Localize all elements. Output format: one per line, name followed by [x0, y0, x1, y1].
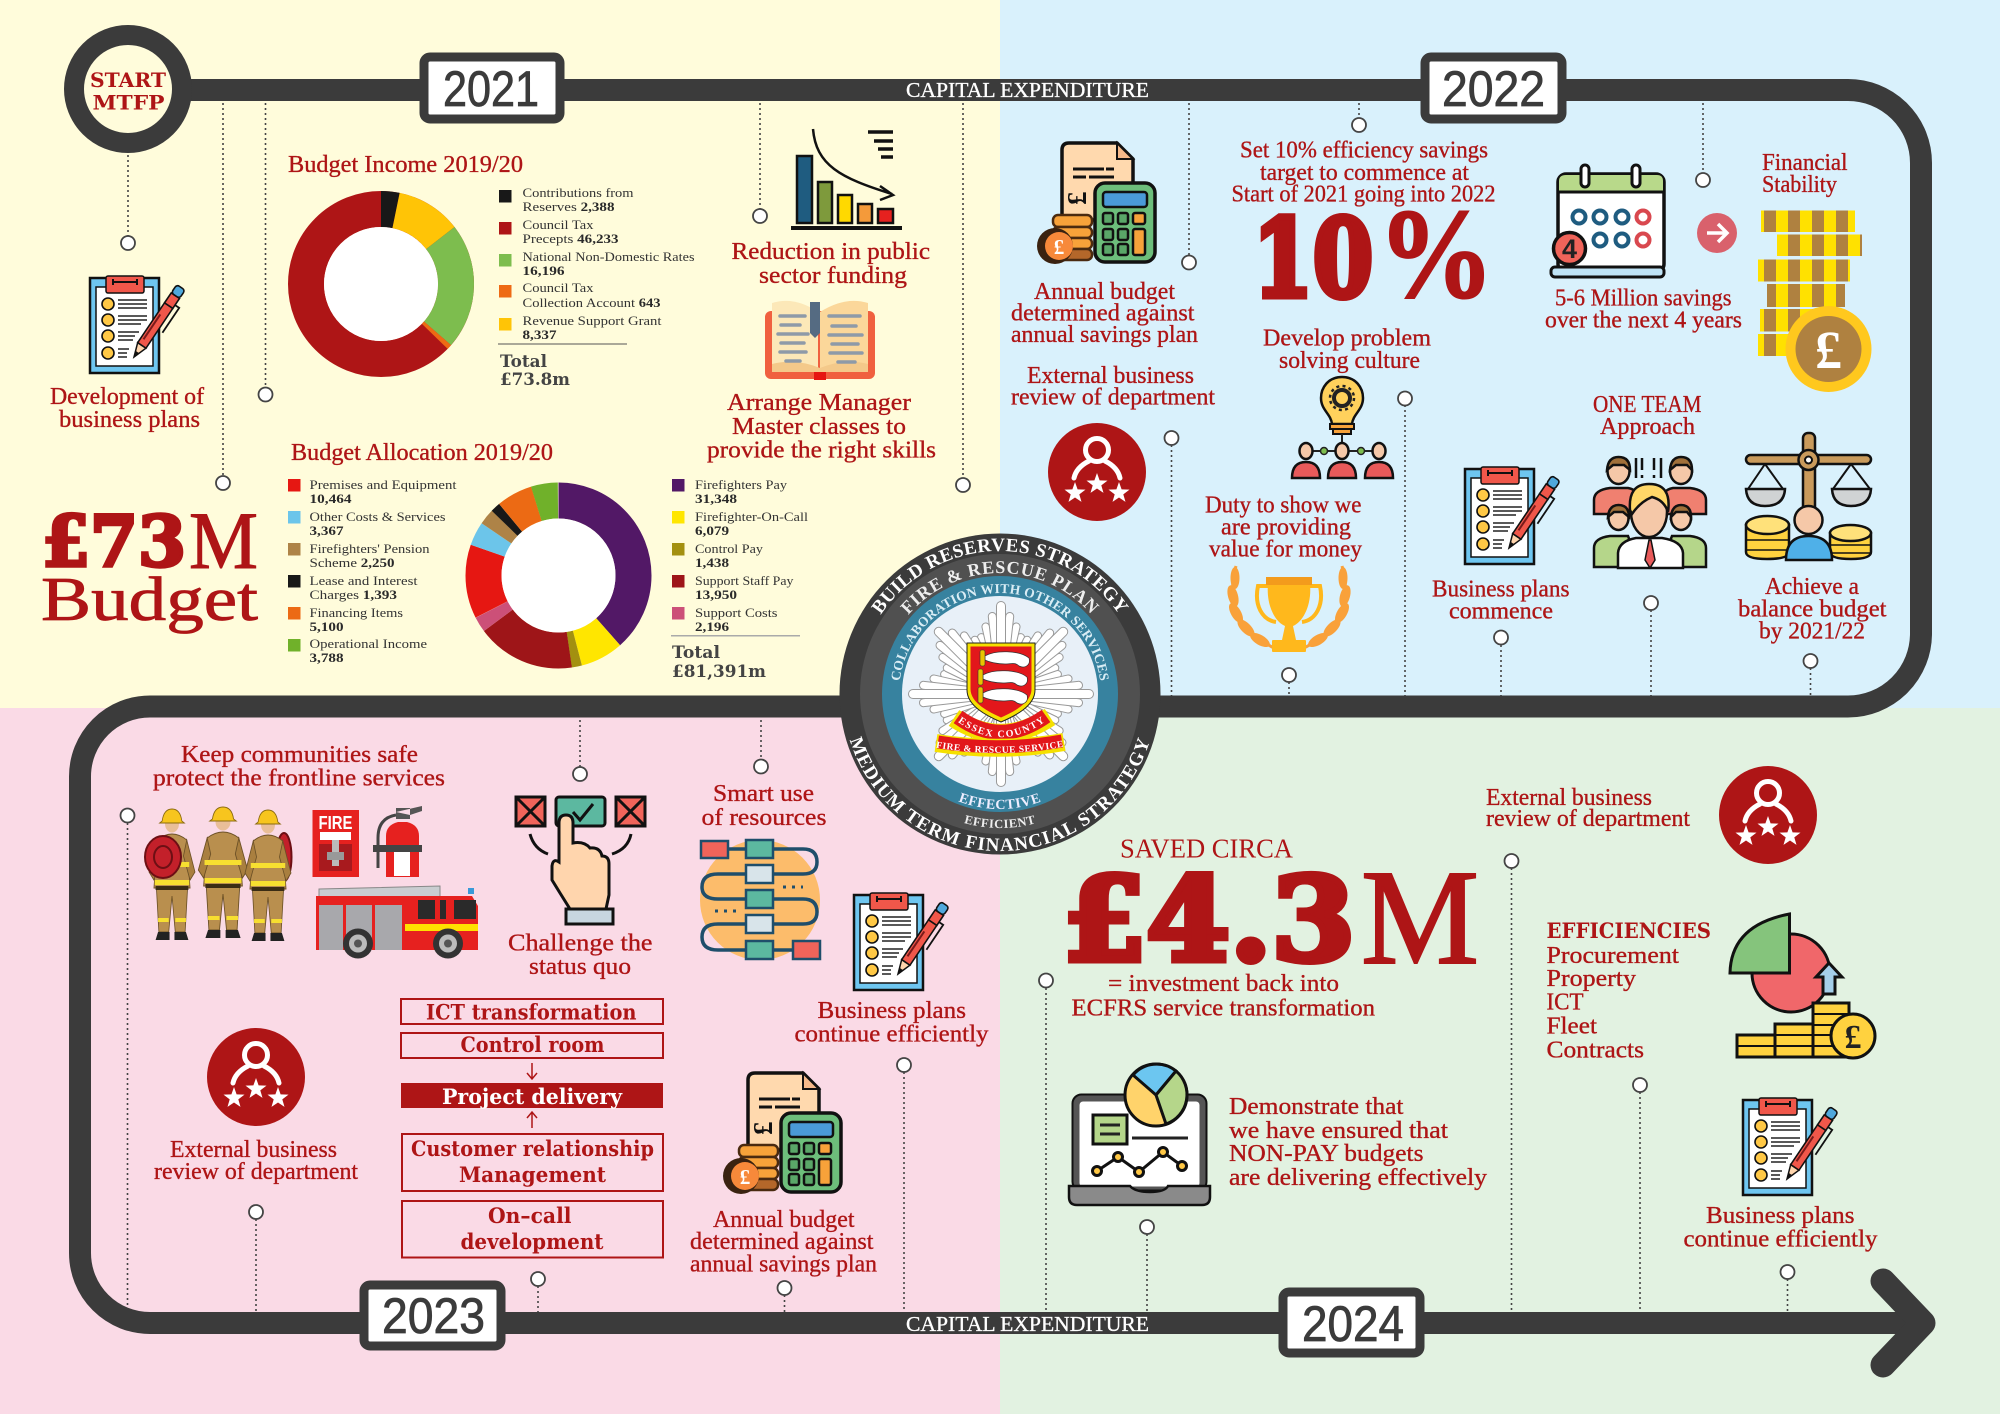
year box 2021: 2021 [443, 61, 539, 117]
legend: allocation left: 5,100 [310, 619, 344, 634]
text: reduction in public sector funding: Reduction in public [732, 239, 930, 265]
icon: coin stacks [1758, 210, 1872, 392]
text: efficiencies list: EFFICIENCIES [1546, 918, 1711, 943]
legend: budget income: Council Tax [522, 217, 594, 232]
text: one team: Approach [1600, 414, 1695, 440]
text: demonstrate non-pay: NON-PAY budgets [1229, 1141, 1424, 1167]
text: keep communities safe: protect the frontline services [153, 766, 445, 792]
icon: clipboard [1465, 467, 1564, 564]
icon: clipboard [854, 893, 953, 990]
project list: project delivery: Project delivery [442, 1084, 623, 1109]
text: efficiency target [1232, 138, 1496, 208]
icon: open book [765, 301, 875, 380]
icon: pie chart with coins: £ [1844, 1019, 1862, 1056]
start marker: START [90, 68, 166, 92]
headline: 4.3M: M [1361, 843, 1479, 993]
legend: budget income: Revenue Support Grant [522, 313, 662, 328]
text: challenge the status quo: Challenge the [508, 930, 652, 956]
text: value for money: are providing [1221, 514, 1351, 540]
text: financial stability [1762, 150, 1848, 198]
legend: budget income: Council Tax [522, 280, 594, 295]
legend: allocation left: 3,367 [310, 523, 344, 538]
text: annual budget: Annual budget [1034, 279, 1175, 305]
legend: budget income: Contributions from [522, 185, 634, 200]
text: annual budget: determined against [1011, 300, 1195, 326]
text: value for money: Duty to show we [1205, 492, 1362, 518]
project list: control room [401, 1032, 663, 1058]
icon: calendar with savings: 4 [1562, 234, 1577, 264]
project list: customer relationship management [402, 1134, 663, 1191]
text: development of business plans: Development of [50, 384, 204, 410]
panel: 2021 [41, 129, 936, 682]
text: challenge the status quo: status quo [529, 954, 631, 980]
legend: budget income: Collection Account 643 [522, 295, 661, 310]
text: value for money: value for money [1209, 536, 1362, 562]
legend: budget income: Reserves 2,388 [522, 199, 615, 214]
headline: 4.3M: £4.3 [1063, 853, 1355, 988]
icon: challenge hand [516, 797, 645, 924]
project list: ict transformation: ICT transformation [426, 1000, 636, 1024]
text: development of business plans [50, 384, 204, 433]
text: business plans commence: commence [1449, 598, 1553, 624]
text: demonstrate non-pay: Demonstrate that [1229, 1094, 1404, 1120]
icon: team [1594, 457, 1706, 568]
background: green quadrant [1000, 708, 2000, 1414]
text: external review: review of department [1011, 384, 1215, 410]
background: pink quadrant [0, 708, 1000, 1414]
text: business plans continue [794, 998, 988, 1048]
panel: 2024 [1063, 766, 1878, 1252]
text: reduction in public sector funding [732, 239, 930, 289]
text: external review: External business [170, 1137, 337, 1163]
legend: allocation right: 31,348 [695, 491, 738, 506]
central badge: EFFICIENT [964, 815, 1034, 828]
legend: allocation left: Firefighters' Pension [310, 541, 430, 556]
central badge [840, 534, 1160, 854]
icon: arrow circle [1697, 213, 1737, 253]
text: efficiencies list [1546, 918, 1711, 1064]
legend: allocation right: £81,391m [672, 662, 766, 682]
legend: allocation left: Charges 1,393 [310, 587, 398, 602]
text: arrange manager master classes [707, 390, 936, 464]
text: keep communities safe: Keep communities safe [181, 742, 418, 768]
text: efficiency target: Set 10% efficiency savings [1240, 138, 1488, 164]
crest: banners [934, 709, 1066, 757]
text: smart use of resources [702, 781, 826, 831]
text: achieve balance budget: balance budget [1738, 596, 1887, 622]
headline: 10 percent: % [1378, 183, 1494, 325]
legend: allocation left: Scheme 2,250 [310, 555, 394, 570]
legend: allocation right [671, 477, 808, 682]
text: external review [1011, 363, 1215, 410]
icon: fire alarm sign [312, 810, 359, 877]
icon: fire alarm sign: FIRE [318, 813, 352, 833]
heading: budget income: Budget Income 2019/20 [288, 152, 523, 178]
text: reduction in public sector funding: sector funding [759, 263, 907, 289]
icon: firefighters [145, 807, 292, 941]
legend: allocation right: Control Pay [695, 541, 764, 556]
legend: allocation right: Firefighter-On-Call [695, 509, 808, 524]
crest: banners: FIRE & RESCUE SERVICE [936, 740, 1064, 753]
text: efficiencies list: Contracts [1546, 1038, 1644, 1064]
project list: project delivery [401, 1083, 663, 1109]
text: efficiencies list: Property [1546, 966, 1636, 992]
project list: customer relationship management: Management [459, 1162, 606, 1187]
icon: pie chart with coins [1730, 914, 1875, 1058]
text: savings over four years: 5-6 Million savings [1555, 286, 1732, 312]
legend: budget income: Precepts 46,233 [522, 231, 619, 246]
text: business plans commence: Business plans [1432, 576, 1570, 602]
text: business plans continue: Business plans [1706, 1203, 1854, 1229]
legend: allocation left: Operational Income [310, 636, 427, 651]
legend: allocation left: Financing Items [310, 605, 403, 620]
icon: award [207, 1028, 305, 1126]
start marker: MTFP [92, 90, 164, 114]
central badge: BUILD RESERVES STRATEGY [870, 538, 1129, 615]
project list: on-call development: On–call [488, 1203, 572, 1228]
arrow up [527, 1112, 537, 1128]
legend: allocation right: Support Costs [695, 605, 778, 620]
icon: coin stacks: £ [1815, 320, 1842, 380]
text: external review [1486, 785, 1690, 832]
text: value for money [1205, 492, 1362, 562]
legend: allocation left: Lease and Interest [310, 573, 418, 588]
legend: allocation left: Other Costs & Services [310, 509, 446, 524]
legend: budget income: 8,337 [522, 327, 557, 342]
text: one team [1593, 392, 1702, 440]
text: smart use of resources: Smart use [713, 781, 814, 807]
text: financial stability: Stability [1762, 172, 1837, 198]
headline: 73M budget: Budget [41, 566, 258, 634]
central badge: MEDIUM TERM FINANCIAL STRATEGY [850, 736, 1149, 852]
text: annual budget: annual savings plan [690, 1252, 877, 1278]
arrow down [527, 1063, 537, 1079]
text: arrange manager master classes: provide the right skills [707, 438, 936, 464]
headline: 10 percent [1253, 183, 1494, 325]
text: financial stability: Financial [1762, 150, 1848, 176]
text: efficiencies list: ICT [1546, 990, 1584, 1016]
legend: allocation left: 3,788 [310, 650, 344, 665]
heading: budget allocation: Budget Allocation 2019/20 [291, 440, 553, 466]
text: investment: ECFRS service transformation [1072, 996, 1375, 1022]
text: achieve balance budget: Achieve a [1765, 574, 1859, 600]
text: development of business plans: business plans [59, 407, 200, 433]
icon: idea bulb and team [1292, 377, 1393, 478]
text: external review: review of department [1486, 806, 1690, 832]
headline: 73M budget: M [189, 495, 258, 586]
legend: allocation left: Premises and Equipment [310, 477, 457, 492]
legend: allocation right: 13,950 [695, 587, 737, 602]
legend: budget income: £73.8m [500, 370, 570, 390]
legend: allocation right: Firefighters Pay [695, 477, 788, 492]
panel: 2022 [1011, 138, 1887, 652]
legend: allocation left: 10,464 [310, 491, 352, 506]
legend: allocation right: Total [672, 643, 721, 663]
headline: 10 percent: 10 [1253, 197, 1373, 322]
text: annual budget: annual savings plan [1011, 322, 1198, 348]
text: problem solving [1263, 326, 1431, 374]
headline: 4.3M [1063, 843, 1479, 993]
text: business plans continue: continue efficiently [1684, 1226, 1878, 1252]
text: annual budget [1011, 279, 1198, 348]
text: business plans continue: continue efficiently [794, 1022, 988, 1048]
panel: 2023 [145, 742, 988, 1278]
headline: 73M budget: £73 [42, 500, 186, 583]
text: external review: review of department [154, 1159, 358, 1185]
icon: calendar with savings [1551, 165, 1664, 277]
icon: fire engine [316, 886, 478, 958]
text: external review: External business [1027, 363, 1194, 389]
text: external review [154, 1137, 358, 1185]
icon: fire extinguisher [373, 806, 422, 877]
text: saved circa: SAVED CIRCA [1120, 834, 1293, 864]
year box 2024: 2024 [1302, 1296, 1404, 1352]
background: blue quadrant [1000, 0, 2000, 708]
text: business plans commence [1432, 576, 1570, 624]
icon: falling bar chart [791, 129, 902, 230]
project list: customer relationship management: Customer relationship [411, 1136, 654, 1161]
text: annual budget: determined against [690, 1229, 874, 1255]
icon: resource flow [700, 840, 820, 960]
central badge: COLLABORATION WITH OTHER SERVICES [892, 584, 1109, 680]
text: arrange manager master classes: Master classes to [732, 414, 906, 440]
text: demonstrate non-pay: we have ensured that [1229, 1118, 1448, 1144]
icon: scales and coins [1746, 433, 1871, 560]
text: achieve balance budget [1738, 574, 1887, 644]
text: investment [1072, 971, 1375, 1022]
legend: budget income: 16,196 [522, 263, 565, 278]
text: problem solving: solving culture [1279, 348, 1420, 374]
icon: award [1048, 423, 1146, 521]
text: business plans continue: Business plans [818, 998, 966, 1024]
project list: on-call development: development [460, 1229, 604, 1254]
text: efficiencies list: Procurement [1546, 943, 1679, 969]
legend: allocation right: 2,196 [695, 619, 730, 634]
text: external review: External business [1486, 785, 1652, 811]
legend: allocation right: Support Staff Pay [695, 573, 794, 588]
central badge: FIRE & RESCUE PLAN [900, 561, 1100, 615]
icon: award [1719, 766, 1817, 864]
donut chart: budget income [306, 209, 456, 359]
text: keep communities safe [153, 742, 445, 792]
legend: budget income: Total [500, 352, 548, 372]
icon: calculator and invoice [1037, 143, 1155, 264]
project list: on-call development [402, 1201, 663, 1258]
text: investment: = investment back into [1108, 971, 1339, 997]
year box 2022: 2022 [1442, 61, 1545, 117]
start marker [74, 35, 182, 143]
text: savings over four years [1545, 286, 1742, 334]
headline: 73M budget [41, 495, 258, 634]
text: efficiency target: Start of 2021 going into 2022 [1232, 182, 1496, 208]
icon: clipboard [90, 276, 189, 373]
text: arrange manager master classes: Arrange Manager [727, 390, 911, 416]
text: efficiencies list: Fleet [1546, 1014, 1597, 1040]
track label top: CAPITAL EXPENDITURE [906, 78, 1149, 102]
icon: trophy [1225, 566, 1353, 652]
text: annual budget: Annual budget [713, 1207, 855, 1233]
icon: calculator and invoice [723, 1073, 841, 1194]
legend: budget income [498, 185, 694, 390]
track label bottom: CAPITAL EXPENDITURE [906, 1312, 1149, 1336]
background: yellow quadrant [0, 0, 1000, 708]
text: efficiency target: target to commence at [1260, 160, 1469, 186]
crest: banners: ESSEX COUNTY [958, 716, 1044, 738]
text: demonstrate non-pay [1229, 1094, 1487, 1191]
legend: budget income: National Non-Domestic Rates [522, 249, 694, 264]
text: savings over four years: over the next 4 years [1545, 308, 1742, 334]
legend: allocation left [288, 477, 457, 665]
project list: control room: Control room [460, 1032, 604, 1057]
text: achieve balance budget: by 2021/22 [1759, 618, 1865, 644]
text: one team: ONE TEAM [1593, 392, 1702, 418]
central badge: EFFECTIVE [958, 792, 1040, 810]
crest: shield [967, 643, 1035, 722]
timeline connectors and pins [120, 98, 1818, 1314]
legend: allocation right: 1,438 [695, 555, 730, 570]
text: annual budget [690, 1207, 877, 1278]
icon: laptop with charts [1069, 1064, 1210, 1205]
year box 2023: 2023 [382, 1288, 485, 1344]
text: challenge the status quo [508, 930, 652, 980]
text: smart use of resources: of resources [702, 805, 826, 831]
donut chart: budget allocation [484, 500, 634, 650]
crest: star burst [913, 606, 1089, 782]
icon: clipboard [1743, 1098, 1842, 1195]
text: demonstrate non-pay: are delivering effectively [1229, 1165, 1487, 1191]
text: problem solving: Develop problem [1263, 326, 1431, 352]
legend: allocation right: 6,079 [695, 523, 730, 538]
text: business plans continue [1684, 1203, 1878, 1252]
